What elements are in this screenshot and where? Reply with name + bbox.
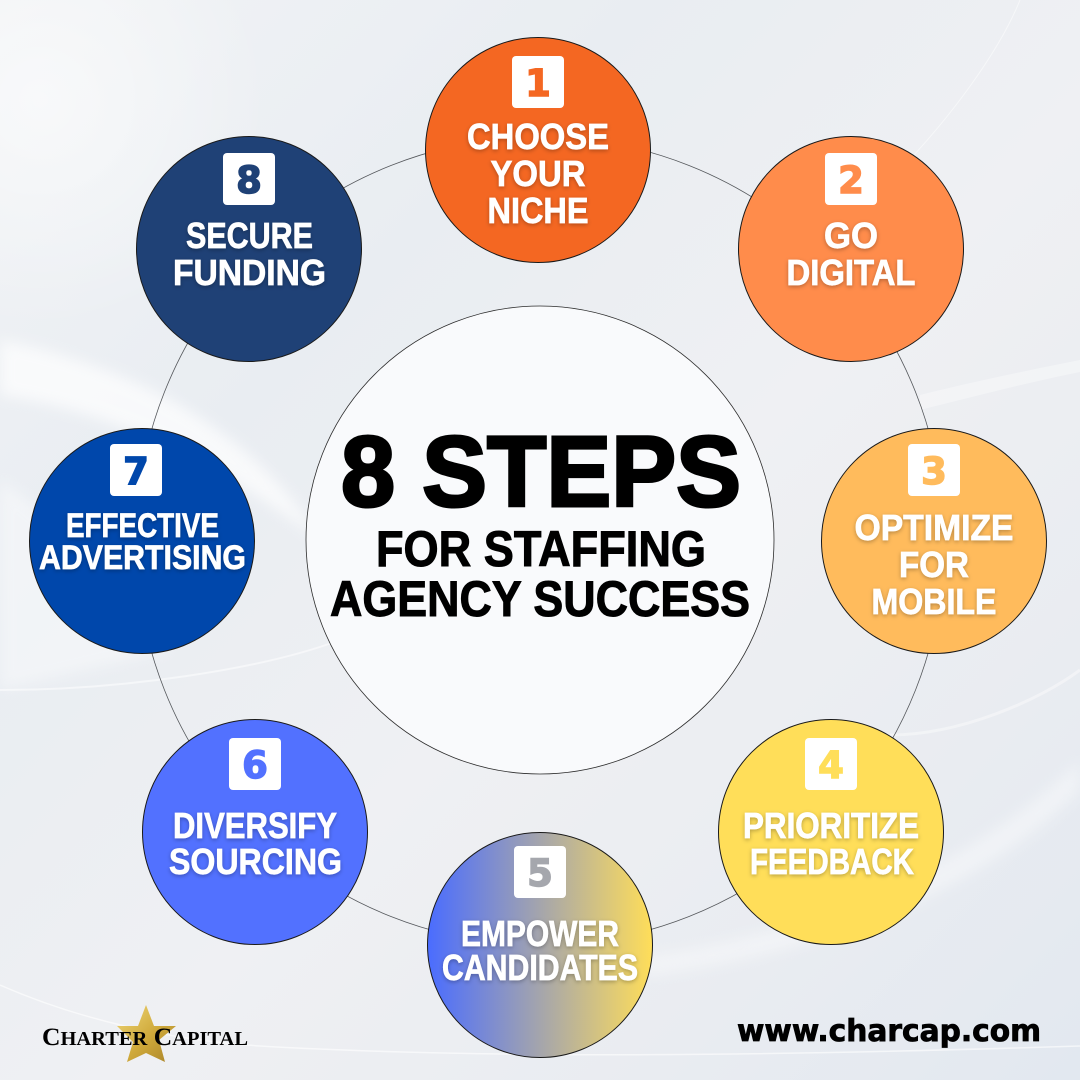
step 6: diversify sourcing	[142, 720, 368, 944]
step 4: prioritize feedback: 4	[818, 744, 844, 787]
step 8: secure funding	[136, 136, 362, 362]
step 6: diversify sourcing: DIVERSIFY	[173, 805, 337, 846]
logo: Charter Capital: CHARTER CAPITAL	[42, 1024, 248, 1051]
step 4: prioritize feedback: FEEDBACK	[750, 841, 914, 882]
step 5: empower candidates	[428, 832, 652, 1058]
step 7: effective advertising	[30, 428, 254, 654]
step 3: optimize for mobile	[822, 428, 1046, 654]
subheading line 1: FOR STAFFING	[376, 521, 706, 577]
connecting ring	[136, 137, 944, 945]
step 6: diversify sourcing: 6	[242, 744, 268, 787]
step 1: choose your niche: 1	[525, 62, 551, 105]
step 1: choose your niche: CHOOSE	[467, 116, 609, 157]
step 4: prioritize feedback: PRIORITIZE	[743, 805, 919, 846]
step 2: go digital: GO	[824, 215, 878, 256]
subheading line 2: AGENCY SUCCESS	[330, 571, 750, 627]
step 7: effective advertising: ADVERTISING	[39, 539, 246, 577]
step 3: optimize for mobile: MOBILE	[872, 581, 996, 622]
step 2: go digital: DIGITAL	[786, 252, 916, 293]
step 1: choose your niche: NICHE	[488, 190, 588, 231]
step 5: empower candidates: EMPOWER	[461, 913, 619, 954]
step 3: optimize for mobile: FOR	[899, 544, 969, 585]
step 7: effective advertising: 7	[123, 450, 149, 493]
step 7: effective advertising: EFFECTIVE	[66, 507, 219, 545]
central panel: title	[306, 306, 774, 774]
step 8: secure funding: 8	[236, 159, 262, 202]
step 4: prioritize feedback	[718, 720, 944, 944]
step 3: optimize for mobile: 3	[921, 450, 947, 493]
heading: 8 STEPS: 8 STEPS	[341, 416, 741, 528]
step 8: secure funding: FUNDING	[173, 252, 326, 293]
website url: www.charcap.com	[737, 1014, 1041, 1049]
logo: Charter Capital	[42, 1005, 248, 1062]
step 2: go digital	[738, 136, 964, 362]
step 2: go digital: 2	[838, 159, 864, 202]
step 1: choose your niche: YOUR	[490, 153, 586, 194]
step 8: secure funding: SECURE	[186, 215, 313, 256]
step 6: diversify sourcing: SOURCING	[169, 841, 342, 882]
step 5: empower candidates: CANDIDATES	[442, 947, 638, 988]
step 1: choose your niche	[426, 38, 650, 262]
step 5: empower candidates: 5	[527, 852, 553, 895]
icon: gold star	[117, 1005, 176, 1062]
step 3: optimize for mobile: OPTIMIZE	[854, 507, 1014, 548]
